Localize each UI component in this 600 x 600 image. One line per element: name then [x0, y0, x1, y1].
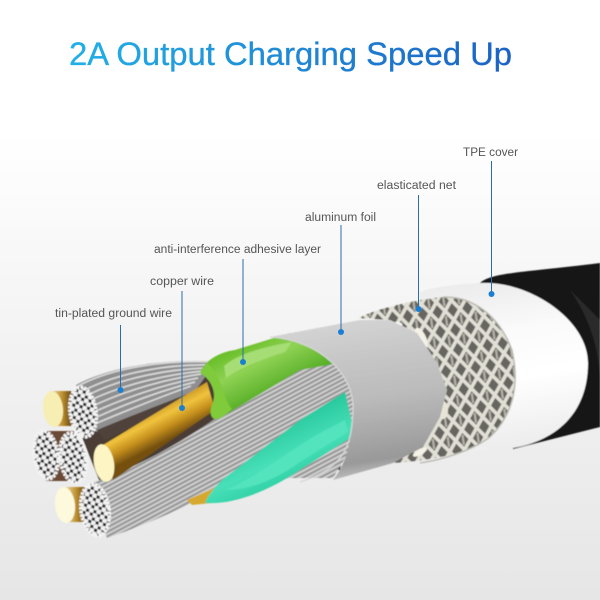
copper wire: [91, 382, 215, 483]
tin-plated ground wire: [76, 361, 216, 440]
callout: aluminum foil: [305, 212, 376, 335]
wire end: top strand: [67, 385, 99, 439]
lower stranded bundle: [88, 358, 355, 538]
callout: anti-interference adhesive layer: [154, 244, 321, 365]
small gold wire bottom: [53, 486, 88, 524]
gold wire tip near teal: [187, 486, 220, 505]
callout: copper wire: copper wire: [150, 276, 214, 288]
aluminum foil: [270, 320, 447, 482]
callout: TPE cover: [463, 147, 518, 297]
wire end: centre strand: [57, 431, 89, 485]
callout: TPE cover: TPE cover: [463, 147, 518, 159]
title: 2A Output Charging Speed Up: [69, 36, 512, 72]
TPE cover: [420, 283, 588, 464]
callout: copper wire: [150, 276, 214, 411]
small gold wire top: [41, 390, 74, 428]
callout: tin-plated ground wire: tin-plated ground wire: [55, 308, 172, 320]
elasticated net: [358, 297, 515, 463]
black outer jacket: [480, 263, 600, 449]
callout: elasticated net: elasticated net: [377, 180, 457, 192]
illustration: cable cross-section: [31, 263, 600, 538]
wire end: bottom strand: [78, 482, 112, 538]
callout: aluminum foil: aluminum foil: [305, 212, 376, 224]
callout: anti-interference adhesive layer: anti-interference adhesive layer: [154, 244, 321, 256]
teal insulated wire: [205, 392, 355, 503]
wire end: left strand: [31, 430, 61, 480]
callout: elasticated net: [377, 180, 457, 312]
anti-interference adhesive layer: [200, 333, 345, 419]
middle gold wire stub: [46, 431, 74, 481]
callout: tin-plated ground wire: [55, 308, 172, 393]
dark shadow behind wires: [80, 337, 353, 495]
